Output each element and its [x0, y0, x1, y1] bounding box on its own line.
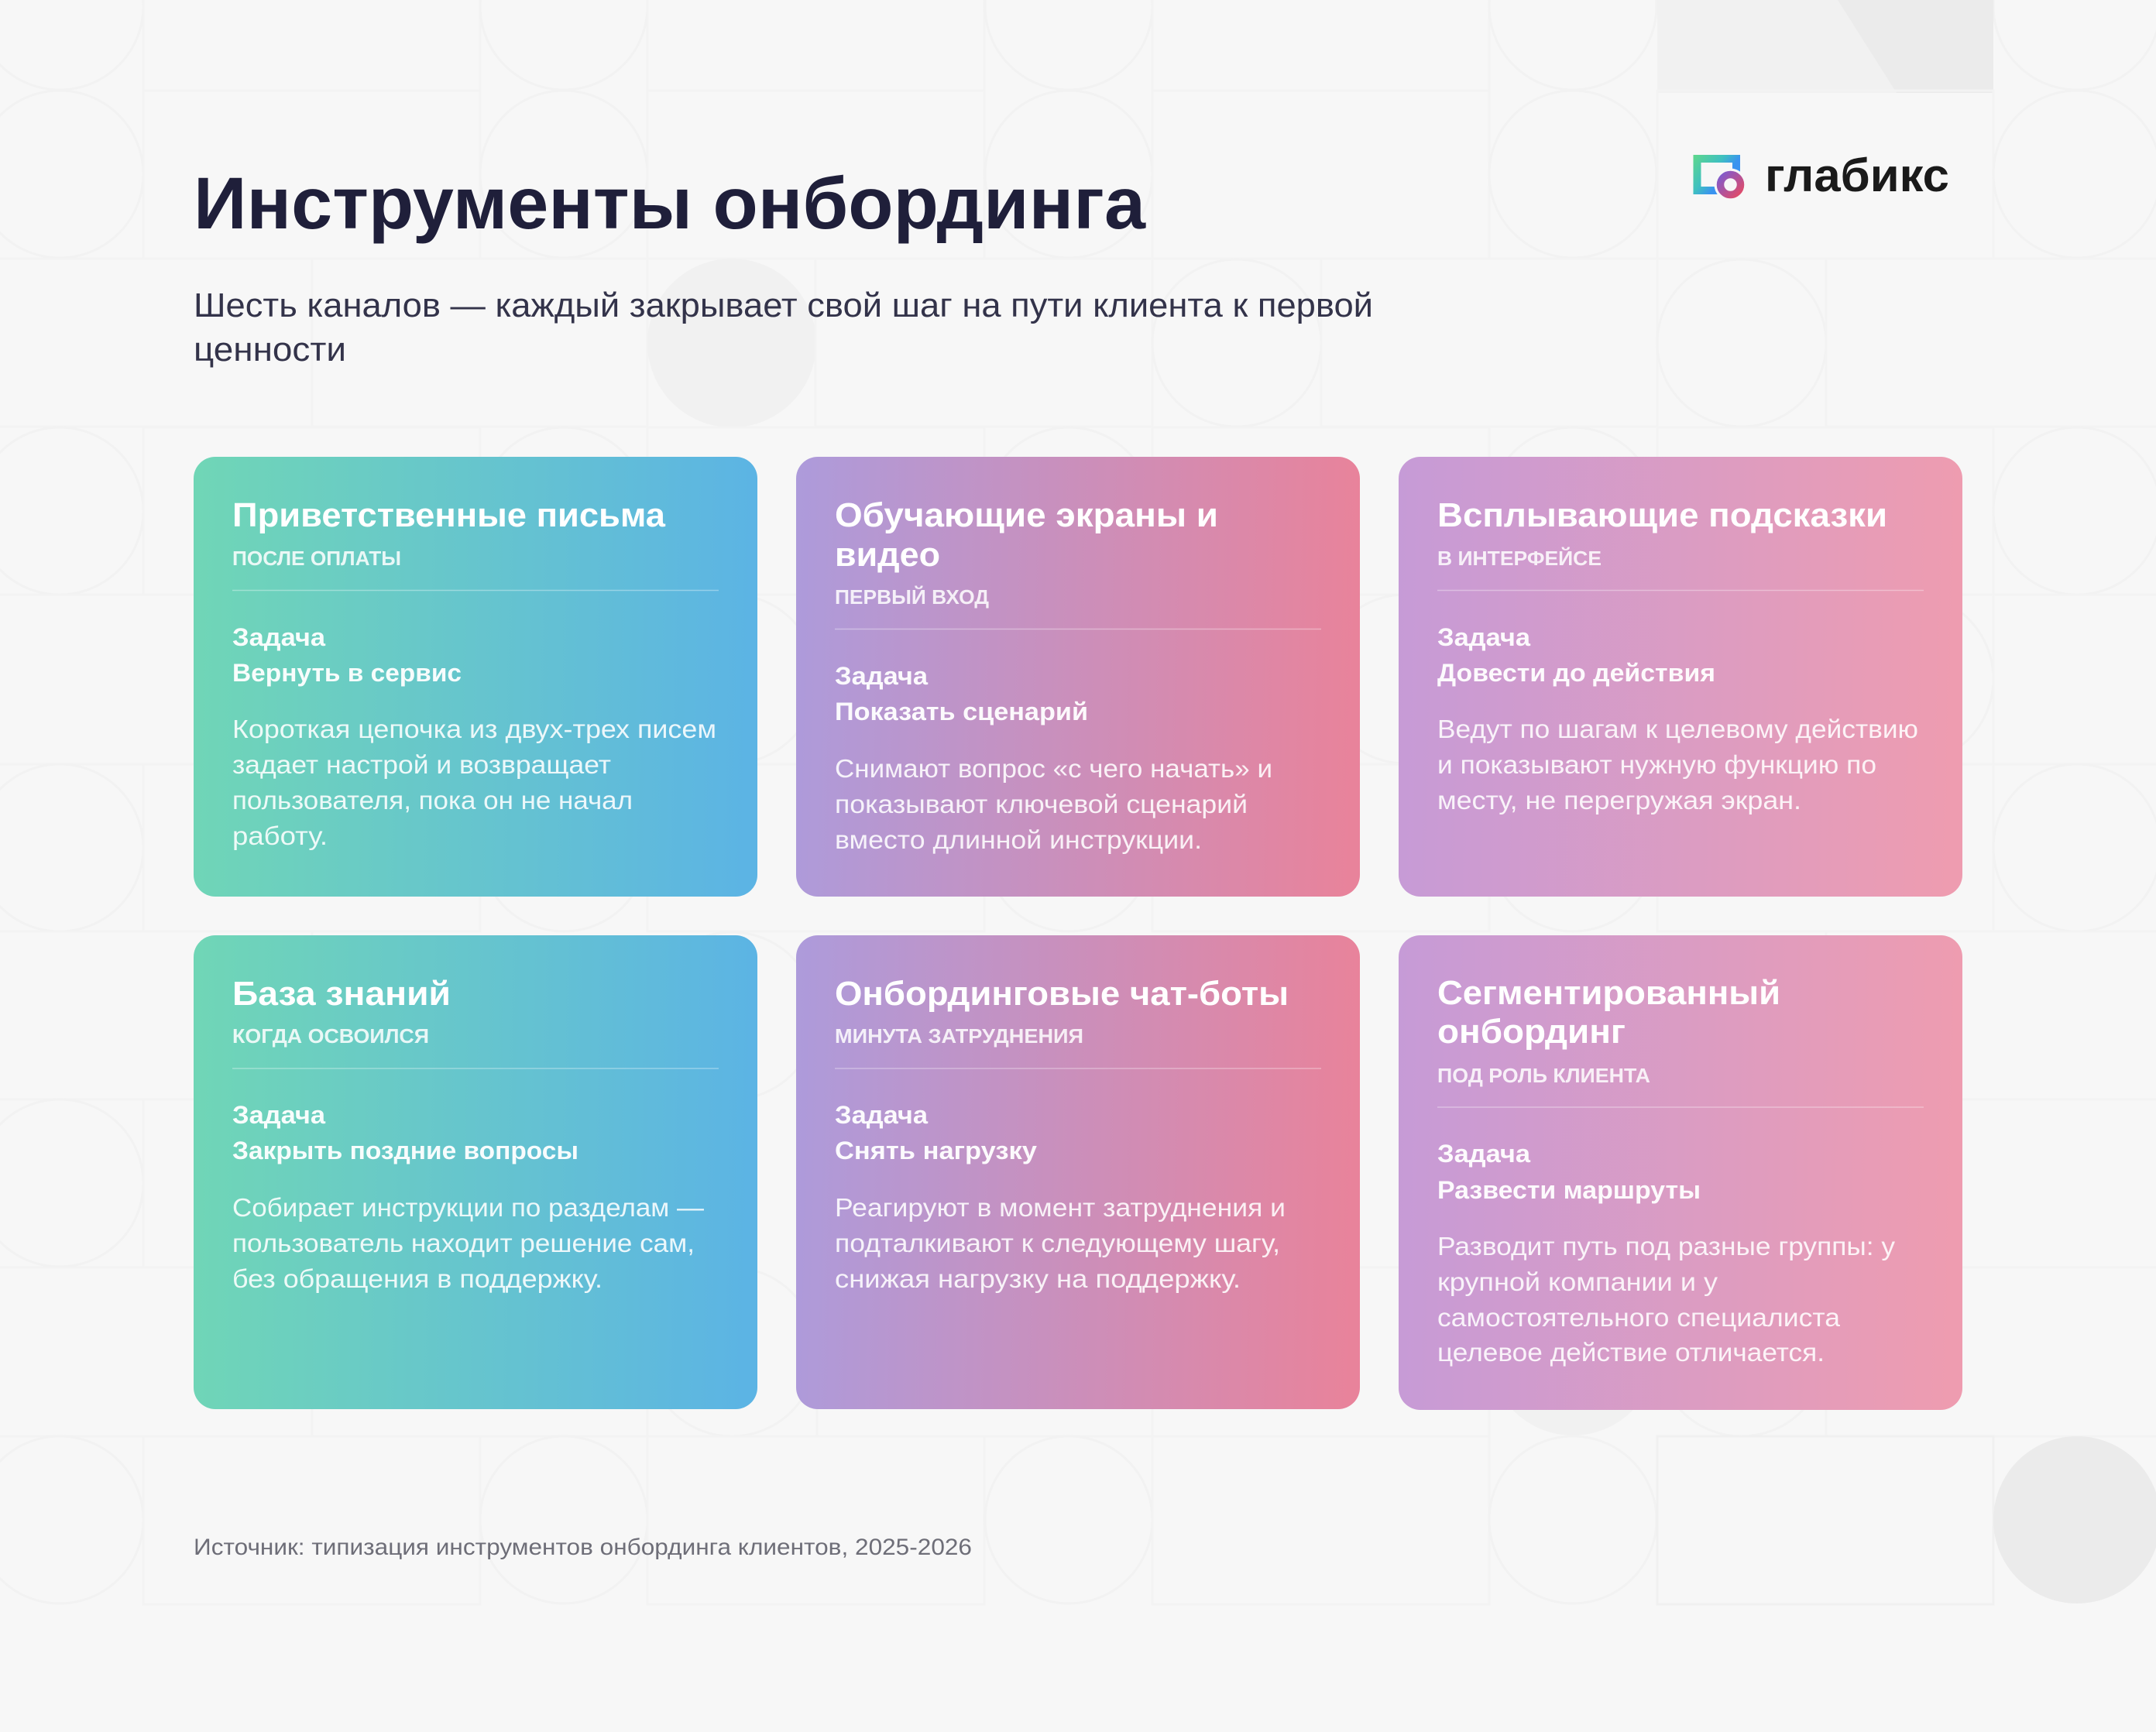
card description: и показывают нужную функцию по: [1437, 751, 1876, 780]
card description: Снимают вопрос «с чего начать» и: [835, 755, 1272, 784]
card description: работу.: [232, 822, 328, 851]
card stage: КОГДА ОСВОИЛСЯ: [232, 1024, 429, 1048]
card description: Разводит путь под разные группы: у: [1437, 1233, 1895, 1261]
row 0: [0, 0, 143, 90]
card task: Вернуть в сервис: [232, 659, 462, 687]
card task: Задача: [232, 623, 325, 651]
card task: Задача: [1437, 1140, 1530, 1168]
card heading: База знаний: [232, 975, 451, 1013]
panel: сегментированный онбординг: [1399, 935, 1962, 1410]
card description: [835, 755, 1272, 855]
card task: Показать сценарий: [835, 698, 1088, 725]
card description: без обращения в поддержку.: [232, 1265, 603, 1294]
card description: крупной компании и у: [1437, 1268, 1718, 1297]
panel: база знаний: [194, 935, 757, 1409]
card task: Задача: [1437, 623, 1530, 651]
logo: глабикс: [1693, 149, 1949, 201]
card description: снижая нагрузку на поддержку.: [835, 1265, 1241, 1294]
card description: пользователь находит решение сам,: [232, 1230, 695, 1258]
row 7: [0, 1099, 143, 1267]
card description: Ведут по шагам к целевому действию: [1437, 715, 1918, 744]
card description: показывают ключевой сценарий: [835, 791, 1248, 819]
card heading: Сегментированный: [1437, 974, 1780, 1012]
card task: [232, 623, 462, 687]
card task: Задача: [232, 1101, 325, 1129]
card description: целевое действие отличается.: [1437, 1339, 1825, 1367]
card heading: онбординг: [1437, 1013, 1626, 1051]
subtitle: [194, 286, 1373, 369]
card task: [232, 1101, 578, 1164]
card description: [232, 1194, 705, 1294]
row 8: [0, 1267, 312, 1436]
panel: приветственные письма: [194, 457, 757, 897]
card description: месту, не перегружая экран.: [1437, 787, 1801, 815]
card task: Задача: [835, 662, 928, 690]
card description: самостоятельного специалиста: [1437, 1304, 1840, 1332]
card heading: [1437, 974, 1780, 1051]
row 9: [0, 1436, 143, 1603]
card heading: [835, 496, 1218, 574]
panel: обучающие экраны и видео: [796, 457, 1360, 897]
card stage: В ИНТЕРФЕЙСЕ: [1437, 547, 1602, 570]
panel: онбординговые чат-боты: [796, 935, 1360, 1409]
card description: подталкивают к следующему шагу,: [835, 1230, 1280, 1258]
card description: Собирает инструкции по разделам —: [232, 1194, 705, 1223]
row 3: [0, 427, 143, 595]
card description: [232, 715, 716, 851]
card task: Задача: [835, 1101, 928, 1129]
card heading: Онбординговые чат-боты: [835, 975, 1289, 1013]
card description: задает настрой и возвращает: [232, 751, 611, 780]
card description: Реагируют в момент затруднения и: [835, 1194, 1286, 1223]
row 5: [0, 764, 143, 931]
subtitle: ценности: [194, 331, 346, 369]
title: Инструменты онбординга: [194, 163, 1146, 245]
card heading: Приветственные письма: [232, 496, 666, 534]
card stage: МИНУТА ЗАТРУДНЕНИЯ: [835, 1024, 1083, 1048]
card heading: Всплывающие подсказки: [1437, 496, 1887, 534]
subtitle: Шесть каналов — каждый закрывает свой шаг на пути клиента к первой: [194, 286, 1373, 324]
card task: Развести маршруты: [1437, 1176, 1701, 1204]
card description: [1437, 715, 1918, 815]
row 6: [0, 931, 312, 1099]
card stage: ПЕРВЫЙ ВХОД: [835, 585, 989, 609]
card description: пользователя, пока он не начал: [232, 787, 633, 815]
card description: [1437, 1233, 1895, 1367]
card task: [1437, 1140, 1701, 1204]
row 2: [0, 259, 312, 427]
card task: [1437, 623, 1715, 687]
card heading: Обучающие экраны и: [835, 496, 1218, 534]
panel: всплывающие подсказки: [1399, 457, 1962, 897]
card stage: ПОД РОЛЬ КЛИЕНТА: [1437, 1064, 1650, 1087]
card task: Довести до действия: [1437, 659, 1715, 687]
card description: Короткая цепочка из двух-трех писем: [232, 715, 716, 744]
row 1: [0, 91, 143, 258]
logo wordmark: глабикс: [1765, 149, 1949, 201]
card stage: ПОСЛЕ ОПЛАТЫ: [232, 547, 401, 570]
card task: [835, 662, 1088, 725]
card description: [835, 1194, 1286, 1294]
card description: вместо длинной инструкции.: [835, 826, 1202, 855]
row 4: [0, 595, 312, 764]
card task: Снять нагрузку: [835, 1137, 1037, 1164]
icon: logo mark: [1693, 155, 1747, 201]
card task: Закрыть поздние вопросы: [232, 1137, 578, 1164]
source note: Источник: типизация инструментов онбординга клиентов, 2025-2026: [194, 1535, 972, 1560]
card task: [835, 1101, 1037, 1164]
card heading: видео: [835, 536, 940, 574]
